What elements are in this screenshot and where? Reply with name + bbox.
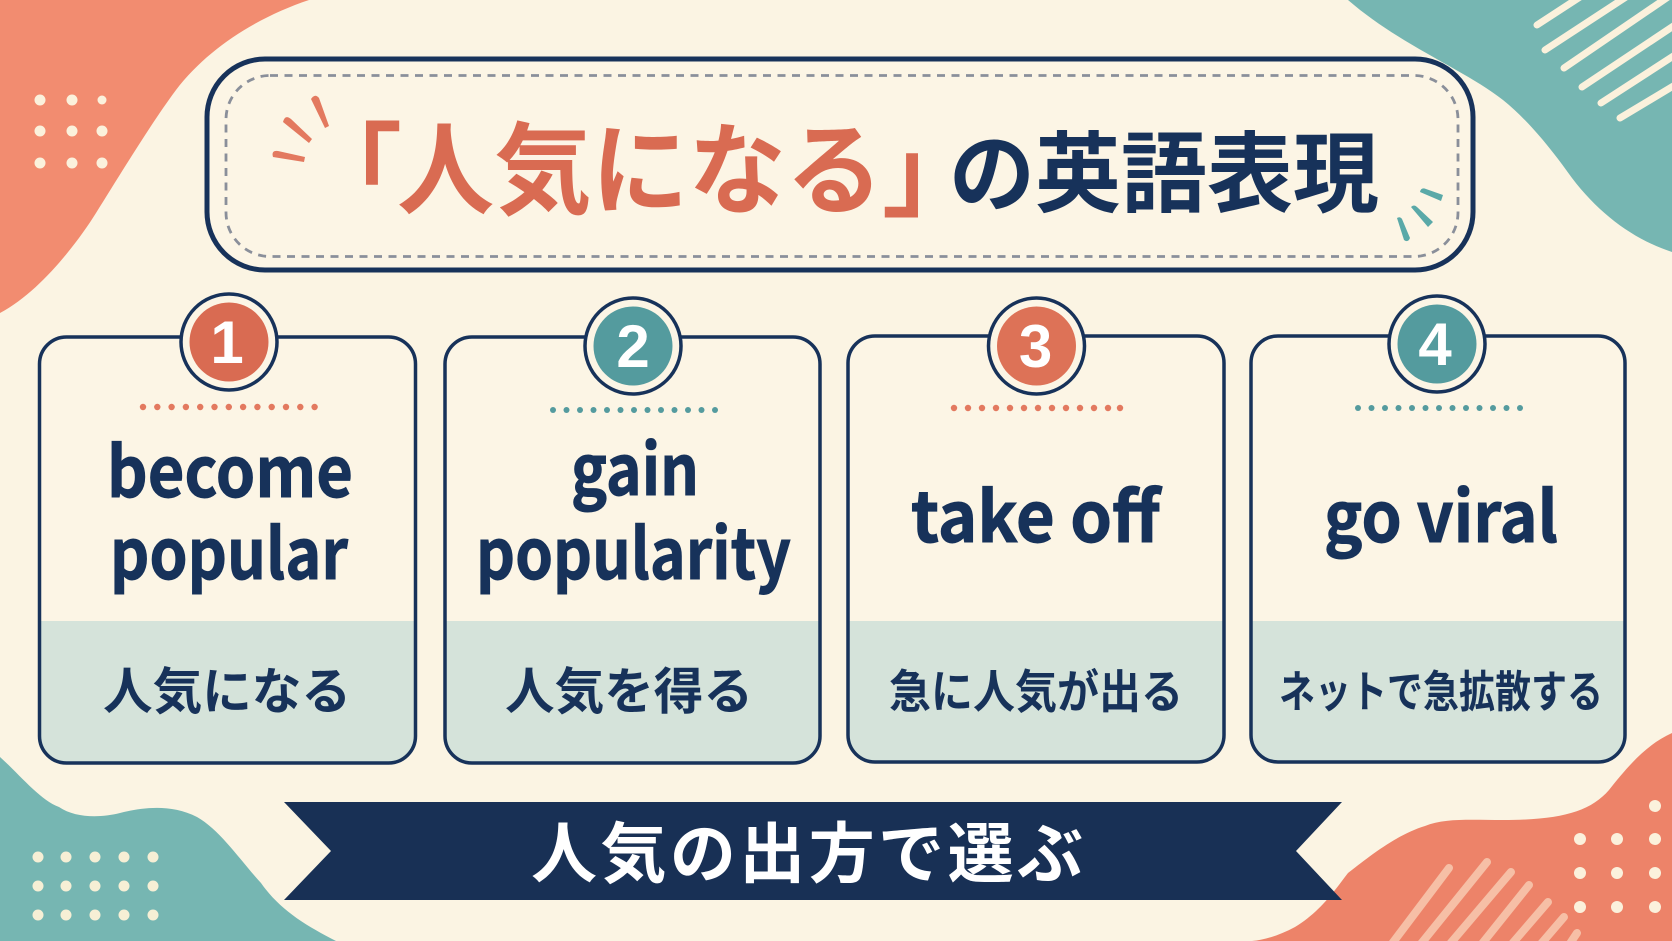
english phrase 2: gain [571,415,699,516]
english phrase 4: go viral [1324,462,1558,563]
japanese meaning 4: ネットで急拡散する [1279,668,1603,717]
japanese meaning 2: 人気を得る [505,664,753,720]
badge 3: 3 [1019,313,1052,380]
badge 1 [181,294,277,390]
english phrase 1: become [107,417,353,518]
title panel [207,59,1473,270]
blob: bottom-right coral with stripes and dots [1252,733,1672,941]
badge 4 [1389,296,1485,392]
title text: coral part: 「 [302,116,402,228]
banner text: 人気の出方で選ぶ [531,817,1083,891]
english phrase 1 [107,417,353,600]
icon: teal sparkle [1397,188,1443,241]
badge 1: 1 [210,309,244,376]
badge 3 [988,298,1084,394]
title text: coral part: 」 [882,118,982,230]
dotted divider 4 [1355,405,1523,411]
english phrase 1: popular [110,499,348,600]
card 2 [445,298,820,763]
japanese meaning 3: 急に人気が出る [889,666,1183,718]
dotted divider 1 [140,404,318,410]
card 3 [848,298,1224,762]
title text: coral part: 人気になる [397,116,883,228]
title text: navy part: の英語表現 [949,125,1379,224]
bottom ribbon banner [284,802,1342,900]
card 4 [1251,296,1625,762]
blob: bottom-left teal with dots [0,757,336,941]
english phrase 3: take off [911,462,1162,563]
icon: coral sparkle [273,96,329,162]
blob: top-right teal with stripes [1348,0,1672,252]
badge 2 [585,298,681,394]
dotted divider 3 [951,405,1123,411]
dotted divider 2 [550,407,718,413]
blob: top-left coral with dots [0,0,309,313]
badge 2: 2 [616,313,650,380]
english phrase 2: popularity [476,499,791,600]
badge 4: 4 [1418,311,1452,378]
japanese meaning 1: 人気になる [103,664,351,720]
english phrase 2 [476,415,791,600]
card 1 [40,294,416,763]
